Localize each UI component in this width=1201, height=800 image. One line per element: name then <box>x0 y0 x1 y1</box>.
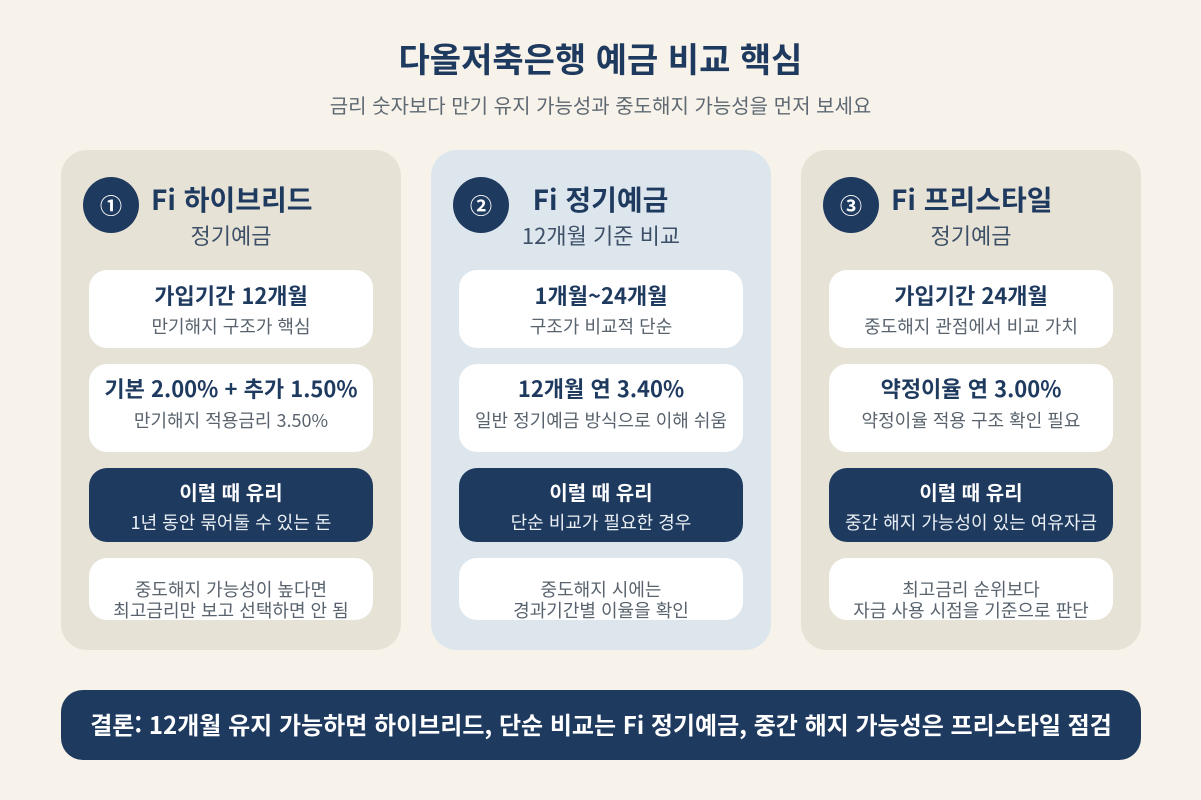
product type: 정기예금 <box>191 219 271 251</box>
rate note: 약정이율 적용 구조 확인 필요 <box>862 407 1080 433</box>
term note: 중도해지 관점에서 비교 가치 <box>864 313 1078 339</box>
badge: number 1: ① <box>100 189 122 221</box>
badge: number 3: ③ <box>840 189 862 221</box>
caution box <box>459 558 743 620</box>
best-for box <box>89 468 373 542</box>
rate note: 만기해지 적용금리 3.50% <box>134 407 328 433</box>
best-for heading: 이럴 때 유리 <box>179 477 283 506</box>
panel: Fi 프리스타일 <box>801 150 1141 650</box>
term box <box>459 270 743 348</box>
best-for heading: 이럴 때 유리 <box>549 477 653 506</box>
rate box <box>459 364 743 452</box>
caution box <box>89 558 373 620</box>
caution text <box>113 576 349 620</box>
product name: Fi 정기예금 <box>533 179 668 219</box>
caution text <box>853 576 1089 620</box>
rate heading: 기본 2.00% + 추가 1.50% <box>104 372 358 404</box>
term heading: 1개월~24개월 <box>535 279 667 311</box>
rate heading: 약정이율 연 3.00% <box>881 372 1061 404</box>
product name: Fi 프리스타일 <box>891 179 1053 219</box>
term box <box>829 270 1113 348</box>
product type: 12개월 기준 비교 <box>522 219 680 251</box>
best-for box <box>459 468 743 542</box>
term heading: 가입기간 12개월 <box>154 279 308 311</box>
term note: 구조가 비교적 단순 <box>530 313 672 339</box>
conclusion text: 결론: 12개월 유지 가능하면 하이브리드, 단순 비교는 Fi 정기예금, 중간 해지 가능성은 프리스타일 점검 <box>90 706 1112 741</box>
badge: number 1 <box>83 177 139 233</box>
term heading: 가입기간 24개월 <box>894 279 1048 311</box>
title: 다올저축은행 예금 비교 핵심 <box>399 33 802 82</box>
conclusion banner <box>61 690 1141 760</box>
product type: 정기예금 <box>931 219 1011 251</box>
badge: number 3 <box>823 177 879 233</box>
term note: 만기해지 구조가 핵심 <box>151 313 311 339</box>
rate note: 일반 정기예금 방식으로 이해 쉬움 <box>475 407 727 433</box>
subtitle: 금리 숫자보다 만기 유지 가능성과 중도해지 가능성을 먼저 보세요 <box>330 90 871 119</box>
rate heading: 12개월 연 3.40% <box>518 372 684 404</box>
caution text: 중도해지 시에는 <box>541 576 661 602</box>
badge: number 2 <box>453 177 509 233</box>
best-for text: 1년 동안 묶어둘 수 있는 돈 <box>131 509 331 535</box>
best-for text: 중간 해지 가능성이 있는 여유자금 <box>845 509 1097 535</box>
best-for box <box>829 468 1113 542</box>
term box <box>89 270 373 348</box>
caution box <box>829 558 1113 620</box>
product name: Fi 하이브리드 <box>151 179 313 219</box>
caution text <box>513 576 689 620</box>
best-for heading: 이럴 때 유리 <box>919 477 1023 506</box>
caution text: 최고금리 순위보다 <box>902 576 1040 602</box>
rate box <box>89 364 373 452</box>
caution text: 중도해지 가능성이 높다면 <box>135 576 327 602</box>
badge: number 2: ② <box>470 189 492 221</box>
rate box <box>829 364 1113 452</box>
panel: Fi 정기예금 <box>431 150 771 650</box>
panel: Fi 하이브리드 <box>61 150 401 650</box>
best-for text: 단순 비교가 필요한 경우 <box>511 509 691 535</box>
